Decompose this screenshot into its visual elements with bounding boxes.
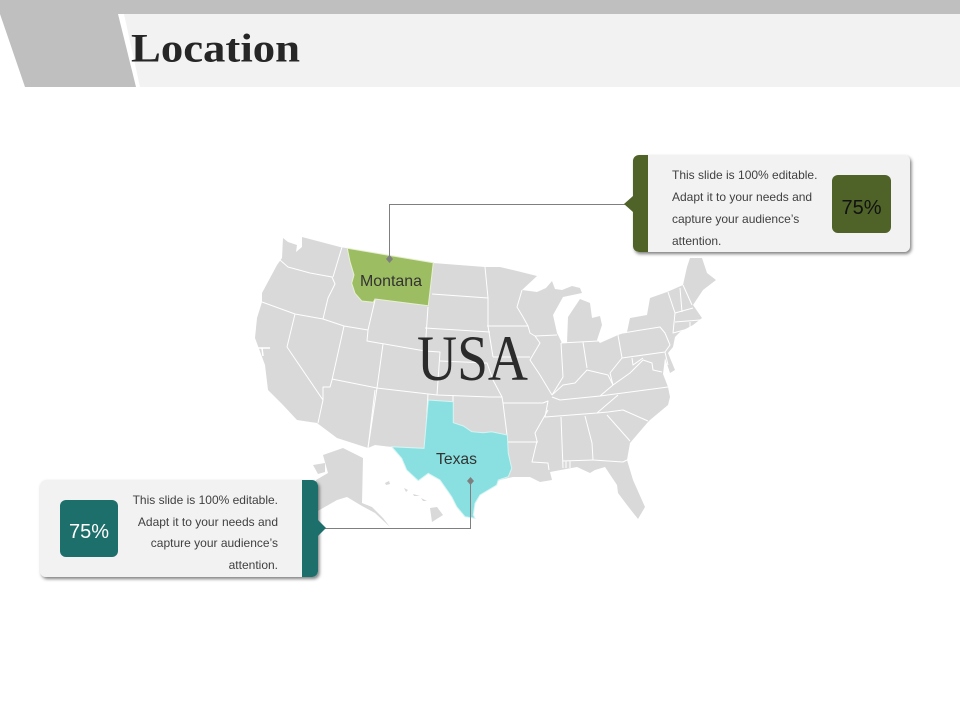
Aleutian island xyxy=(313,463,325,474)
label: Montana: Montana xyxy=(360,273,422,290)
callout accent band xyxy=(302,480,326,577)
map: USA states xyxy=(255,237,716,527)
callout: Montana 75% xyxy=(624,155,910,252)
Montana xyxy=(347,248,433,306)
callout text xyxy=(133,493,278,572)
badge: 75%: 75% xyxy=(69,521,109,543)
callout accent band xyxy=(624,155,648,252)
callout text: This slide is 100% editable. xyxy=(133,493,278,507)
badge: 75% xyxy=(60,500,118,557)
callout text: Adapt it to your needs and xyxy=(138,515,278,529)
map label: USA: USA xyxy=(417,323,528,395)
callout text: attention. xyxy=(229,558,278,572)
callout text: attention. xyxy=(672,234,721,248)
callout: Texas 75% xyxy=(40,480,326,577)
Texas xyxy=(392,400,512,518)
callout text: Adapt it to your needs and xyxy=(672,190,812,204)
header band xyxy=(0,0,960,87)
label: Texas: Texas xyxy=(436,451,477,468)
badge: 75%: 75% xyxy=(841,197,882,219)
contiguous US landmass xyxy=(255,237,716,519)
Hawaii xyxy=(385,481,443,522)
state borders xyxy=(258,247,700,470)
title: Location xyxy=(131,26,300,70)
callout text: capture your audience’s xyxy=(672,212,799,226)
Alaska xyxy=(316,448,390,527)
badge: 75% xyxy=(832,175,891,233)
connector: Texas callout xyxy=(324,477,474,528)
callout text xyxy=(672,168,817,248)
callout text: capture your audience’s xyxy=(151,536,278,550)
connector: Montana callout xyxy=(386,204,626,263)
callout text: This slide is 100% editable. xyxy=(672,168,817,182)
